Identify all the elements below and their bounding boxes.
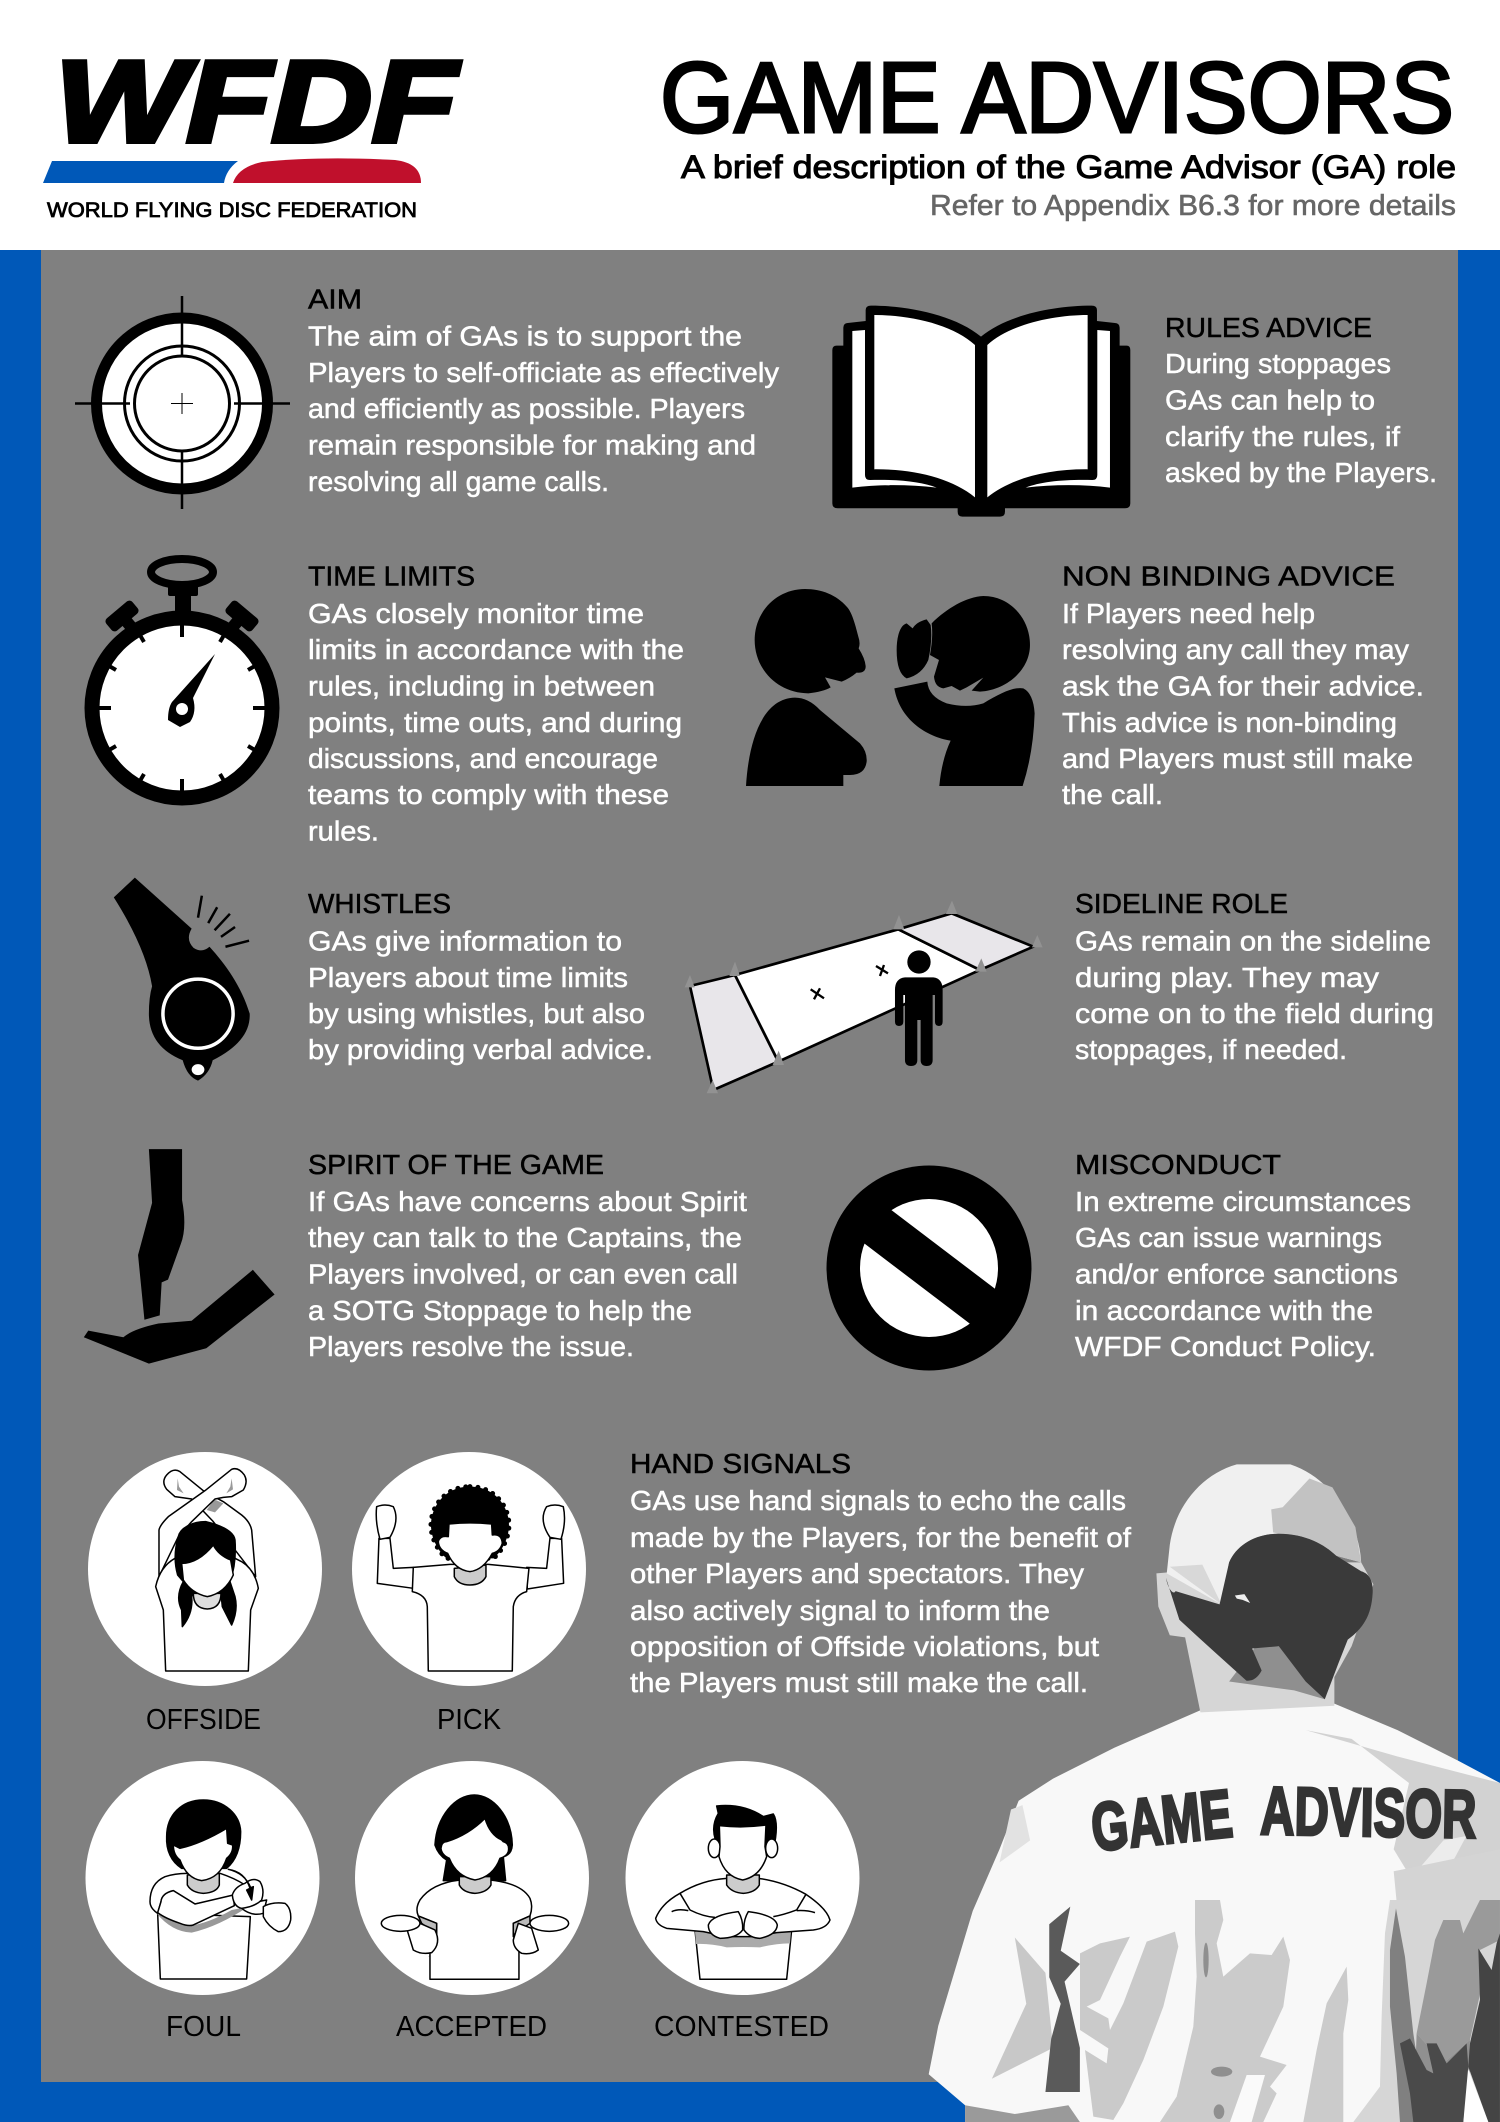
text: rules advice: GAs can help to [1165,384,1375,416]
logo: WFDF: WFDF [55,36,461,166]
text: misconduct: GAs can issue warnings [1075,1222,1382,1253]
icon: two people talking [746,589,1035,786]
icon: stopwatch [92,559,272,798]
icon: field with sideline person [685,901,1043,1093]
text: hand signals: GAs use hand signals to echo the calls [630,1485,1126,1516]
text: aim: The aim of GAs is to support the [308,320,742,352]
signal labels: FOUL [166,2011,241,2043]
text: sideline role: SIDELINE ROLE [1075,888,1288,919]
logo: WFDF: WORLD FLYING DISC FEDERATION [47,198,417,222]
text: non binding advice: This advice is non-binding [1062,707,1397,738]
text: rules advice [1165,312,1437,488]
text: time limits: teams to comply with these [308,779,669,810]
signal labels: CONTESTED [654,2011,829,2043]
text: rules advice: clarify the rules, if [1165,421,1400,452]
signal labels: OFFSIDE [146,1704,261,1736]
text: hand signals [630,1448,1131,1698]
text: non binding advice [1062,560,1424,810]
text: aim: AIM [308,284,362,314]
text: misconduct [1075,1149,1411,1362]
text: spirit of the game: they can talk to the Captains, the [308,1222,742,1253]
text: whistles: WHISTLES [308,888,451,919]
text: non binding advice: If Players need help [1062,598,1315,629]
text: time limits: rules. [308,816,379,846]
text: time limits: discussions, and encourage [308,743,658,774]
title: GAME ADVISORS [660,42,1454,154]
text: hand signals: made by the Players, for the benefit of [630,1522,1131,1553]
signal labels [146,1704,829,2043]
text: misconduct: WFDF Conduct Policy. [1075,1331,1376,1362]
icon: spirit hands [84,1149,275,1364]
text: aim: remain responsible for making and [308,430,756,460]
text: spirit of the game [308,1149,747,1362]
text: non binding advice: NON BINDING ADVICE [1062,560,1395,592]
text: whistles: GAs give information to [308,926,622,956]
text: misconduct: in accordance with the [1075,1295,1373,1326]
text: rules advice: During stoppages [1165,348,1391,379]
shirt lettering: GAME: GAME [1088,1776,1236,1866]
signal: foul [86,1761,320,1995]
text: hand signals: HAND SIGNALS [630,1448,851,1479]
text: spirit of the game: SPIRIT OF THE GAME [308,1149,604,1180]
text: hand signals: the Players must still make the call. [630,1667,1088,1698]
text: time limits: rules, including in between [308,670,655,702]
text: aim: resolving all game calls. [308,466,609,497]
icon: target [75,296,290,509]
logo: WFDF [43,36,461,222]
text: sideline role [1075,888,1434,1065]
text: time limits: limits in accordance with the [308,634,684,665]
text: sideline role: during play. They may [1075,962,1379,993]
text: spirit of the game: Players resolve the issue. [308,1331,634,1362]
text: non binding advice: resolving any call they may [1062,634,1409,665]
text: sideline role: stoppages, if needed. [1075,1034,1347,1065]
text: hand signals: other Players and spectators. They [630,1558,1084,1589]
text: spirit of the game: If GAs have concerns about Spirit [308,1186,747,1217]
text: whistles [308,888,653,1065]
text: time limits: TIME LIMITS [308,560,475,592]
text: aim [308,284,779,497]
text: non binding advice: the call. [1062,779,1163,810]
text: aim: and efficiently as possible. Players [308,393,745,424]
text: time limits: GAs closely monitor time [308,598,644,629]
text: rules advice: asked by the Players. [1165,457,1437,488]
text: spirit of the game: Players involved, or can even call [308,1258,738,1290]
text: sideline role: come on to the field during [1075,998,1434,1029]
icon: open book [832,306,1130,517]
text: rules advice: RULES ADVICE [1165,312,1372,343]
text: aim: Players to self-officiate as effectively [308,357,779,388]
text: time limits [308,560,684,846]
reference note: Refer to Appendix B6.3 for more details [930,190,1456,222]
text: spirit of the game: a SOTG Stoppage to help the [308,1295,692,1326]
signal: contested [626,1761,860,1995]
signal labels: PICK [437,1704,502,1736]
signal: accepted [355,1761,589,1995]
text: whistles: by using whistles, but also [308,998,645,1029]
text: misconduct: MISCONDUCT [1075,1149,1281,1180]
signal labels: ACCEPTED [396,2011,547,2043]
signal: pick [352,1452,586,1686]
text: non binding advice: and Players must still make [1062,743,1413,774]
text: misconduct: and/or enforce sanctions [1075,1258,1398,1290]
text: non binding advice: ask the GA for their advice. [1062,670,1424,702]
text: misconduct: In extreme circumstances [1075,1186,1411,1217]
signal: offside [88,1452,322,1686]
text: sideline role: GAs remain on the sideline [1075,926,1431,956]
text: hand signals: opposition of Offside violations, but [630,1631,1099,1662]
subtitle: A brief description of the Game Advisor (GA) role [681,149,1456,185]
text: hand signals: also actively signal to inform the [630,1595,1050,1626]
text: whistles: Players about time limits [308,962,628,993]
text: whistles: by providing verbal advice. [308,1034,653,1065]
text: time limits: points, time outs, and during [308,707,682,738]
icon: whistle [114,878,250,1081]
icon: prohibition sign [826,1166,1032,1370]
illustration: game advisor figure from behind [929,1464,1500,2122]
